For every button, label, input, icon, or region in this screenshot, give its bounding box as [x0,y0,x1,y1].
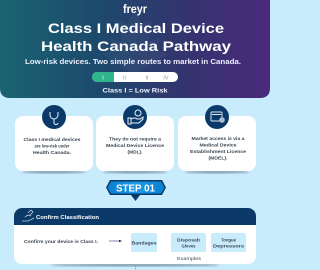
card 1 [15,105,93,174]
card text: Health Canada. [33,150,71,156]
card 3 [178,105,256,174]
card text: They do not require a [109,136,161,142]
title [41,20,231,54]
class selector pill: IV [163,76,169,82]
header banner [0,0,270,98]
examples label: Examples [177,256,202,262]
example chips: Bandages [132,240,157,246]
icon: stethoscope [42,105,66,129]
card text: Class I medical devices [24,137,81,143]
title: Health Canada Pathway [41,38,231,54]
panel header [14,208,256,225]
icon: licence document [205,105,229,129]
card text: (MDL). [128,150,142,156]
title: Class I Medical Device [48,20,224,36]
confirm text: Confirm your device is Class I. [24,239,98,245]
example chips: Gloves [182,244,196,250]
card text: Market access is via a [192,136,245,142]
card text: are low-risk under [34,144,70,150]
step 01 badge: STEP 01 [116,182,155,194]
card 2 [96,105,174,174]
example chips [131,233,246,262]
logo: freyr [123,2,147,16]
card text [24,137,81,156]
class selector pill: II [145,76,149,82]
card text: Establishment Licence [190,149,246,155]
arrow [109,240,122,242]
card text [106,136,164,156]
panel header: Confirm Classification [36,215,100,221]
subtitle: Low-risk devices. Two simple routes to market in Canada. [25,59,241,66]
class label: Class I = Low Risk [102,88,168,94]
class selector pill: I [102,76,104,82]
example chips: Depressors [213,244,244,250]
class selector pill: II [123,76,126,82]
panel: confirm classification [14,208,256,266]
icon: hand with pill [123,105,147,129]
connector dot [134,266,136,270]
example chips: Disposab [177,238,200,244]
class selector pill [92,72,178,82]
card text: Medical Device [200,142,237,148]
card text: (MDEL). [208,156,228,162]
example chips: Tongue [221,238,236,244]
step 01 badge [106,180,166,201]
icon: hand [22,210,34,221]
card text: Medical Device Licence [106,143,164,149]
card text [190,136,246,162]
